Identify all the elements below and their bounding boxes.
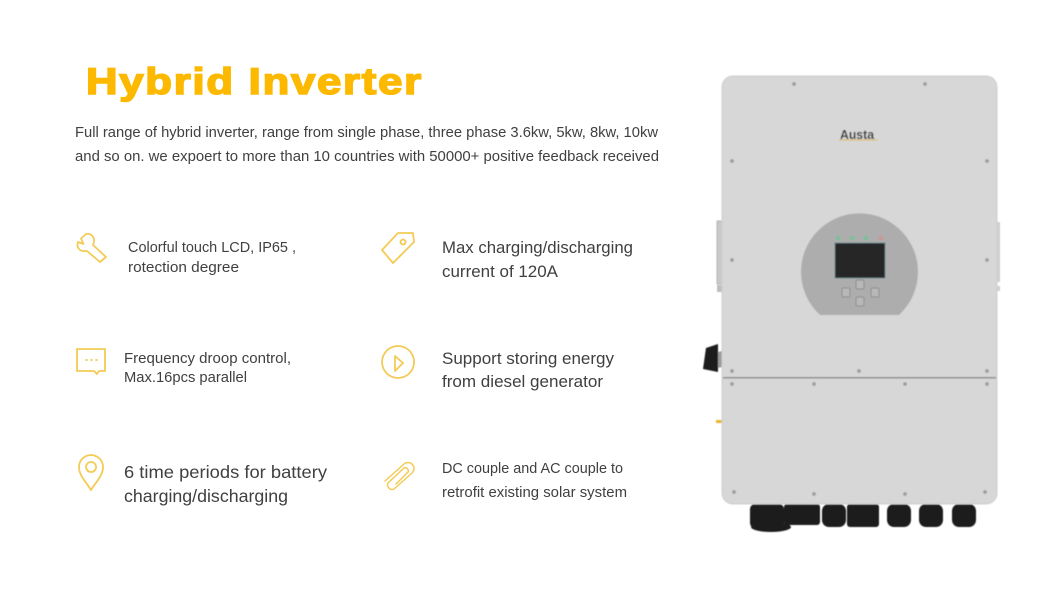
feature: time periods <box>79 455 327 506</box>
feature text: solar retrofit: DC couple and AC couple to <box>442 460 623 477</box>
icon: paperclip <box>385 462 414 489</box>
feature: touch LCD <box>77 234 296 276</box>
feature: charging current <box>382 233 633 281</box>
feature: diesel generator <box>382 346 614 391</box>
intro text <box>75 124 659 165</box>
feature text: droop control <box>124 350 291 386</box>
feature text: solar retrofit <box>442 460 627 501</box>
feature text: droop control: Max.16pcs parallel <box>124 369 247 386</box>
cable glands <box>750 504 976 532</box>
status LEDs <box>836 236 884 240</box>
title: Hybrid Inverter <box>86 60 421 102</box>
feature text: charging current <box>442 238 633 281</box>
feature text: charging current: current of 120A <box>442 262 559 281</box>
intro text: Full range of hybrid inverter, range from single phase, three phase 3.6kw, 5kw, 8kw, 10kw <box>75 124 658 141</box>
icon: speech bubble <box>77 349 105 374</box>
icon: play button <box>382 346 414 378</box>
feature text: time periods <box>124 462 327 506</box>
side brackets <box>717 221 1000 292</box>
feature: droop control <box>77 349 291 386</box>
screws <box>730 82 989 496</box>
feature text: touch LCD <box>128 239 296 276</box>
icon: wrench <box>77 234 106 262</box>
feature text: time periods: 6 time periods for battery <box>124 462 327 482</box>
logo: Austa <box>840 127 875 142</box>
panel seam <box>723 377 996 378</box>
control panel <box>801 213 918 315</box>
feature text: diesel generator <box>442 349 614 391</box>
rotary switch <box>703 344 722 372</box>
feature text: diesel generator: from diesel generator <box>442 372 603 391</box>
feature text: touch LCD: Colorful touch LCD, IP65 , <box>128 239 296 256</box>
buttons <box>842 280 879 306</box>
feature text: time periods: charging/discharging <box>124 486 288 506</box>
LCD screen <box>835 243 885 278</box>
feature text: charging current: Max charging/discharging <box>442 238 633 257</box>
inverter product image <box>703 76 1000 532</box>
feature text: diesel generator: Support storing energy <box>442 349 614 368</box>
intro text: and so on. we expoert to more than 10 countries with 50000+ positive feedback received <box>75 148 659 165</box>
icon: price tag <box>382 233 414 263</box>
icon: map pin <box>79 455 103 490</box>
feature text: touch LCD: rotection degree <box>128 259 239 276</box>
feature: solar retrofit <box>385 460 627 501</box>
feature text: solar retrofit: retrofit existing solar system <box>442 484 627 501</box>
inverter body <box>722 76 997 504</box>
feature text: droop control: Frequency droop control, <box>124 350 291 367</box>
yellow terminal <box>716 420 723 423</box>
